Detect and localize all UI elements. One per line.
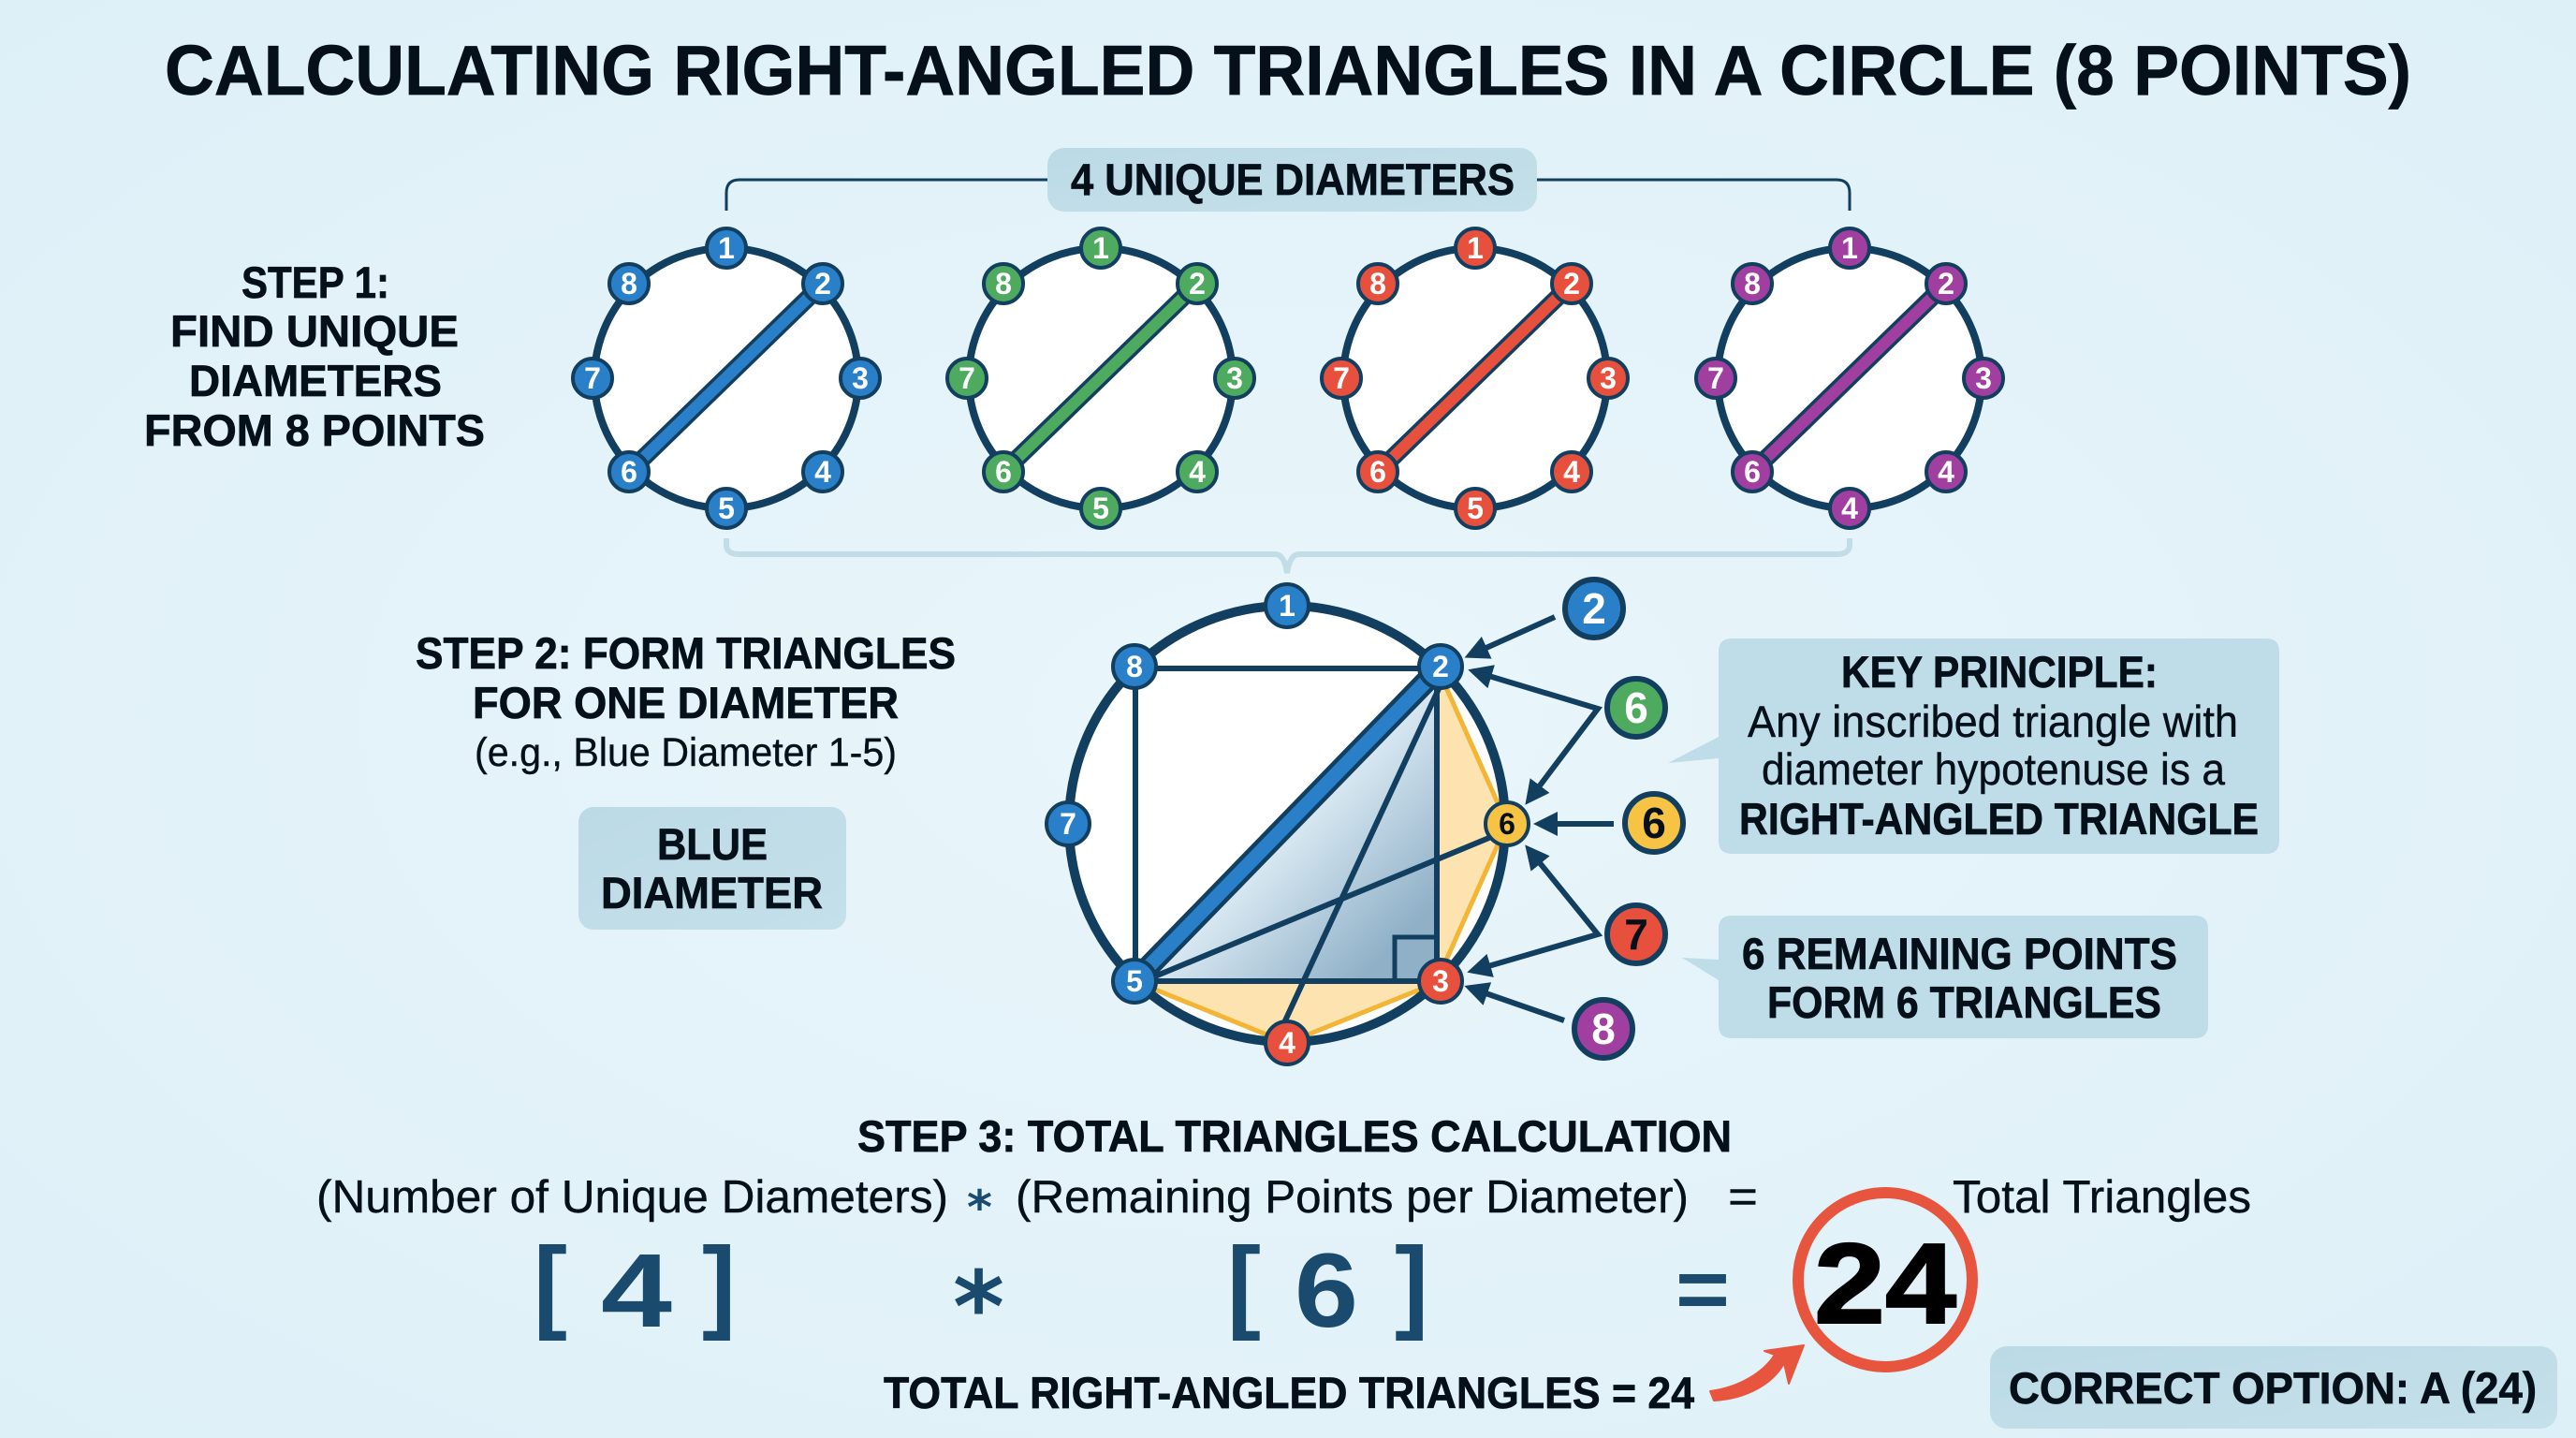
step 2 heading: STEP 2: FORM TRIANGLES — [416, 628, 956, 678]
diameter circle 2: green: 1 — [1092, 231, 1109, 265]
diameter circle 2: green: 6 — [995, 455, 1012, 489]
diameter circle 3: red: 3 — [1600, 361, 1617, 395]
diameter circle 3: red: 7 — [1333, 361, 1350, 395]
yellow triangles — [1134, 667, 1507, 1043]
lower bracket joining circles to step 2 — [726, 538, 1850, 573]
formula in words: * — [967, 1181, 992, 1235]
blue diameter label: BLUE — [657, 819, 768, 869]
diameter circle 1: blue: 6 — [621, 455, 637, 489]
diameter circle 2: green: 3 — [1226, 361, 1243, 395]
shaded right triangle — [1134, 667, 1441, 981]
diameter circle 1: blue: 3 — [852, 361, 869, 395]
correct option badge — [1990, 1346, 2557, 1429]
formula in numbers: 4 — [601, 1232, 672, 1349]
formula in words: (Number of Unique Diameters) — [316, 1172, 948, 1223]
step 1 heading: STEP 1: — [242, 257, 389, 307]
diameter circle 3: red: 4 — [1563, 455, 1580, 489]
diameter circle 3: red — [1322, 228, 1628, 528]
diameter circle 2: green: 5 — [1092, 492, 1109, 525]
total text: TOTAL RIGHT-ANGLED TRIANGLES = 24 — [884, 1368, 1694, 1417]
formula in numbers: 6 — [1295, 1232, 1358, 1349]
numbered points: 5 — [1126, 964, 1143, 998]
title: CALCULATING RIGHT-ANGLED TRIANGLES IN A CIRCLE (8 POINTS) — [165, 31, 2411, 110]
step 2 heading — [416, 628, 956, 775]
formula in numbers: ] — [702, 1226, 736, 1342]
key principle callout: RIGHT-ANGLED TRIANGLE — [1739, 794, 2259, 844]
main circle with inscribed triangles — [1046, 584, 1529, 1064]
key principle callout — [1668, 638, 2279, 854]
step 1 heading: FIND UNIQUE — [170, 306, 459, 356]
top bracket: 4 unique diameters — [726, 148, 1850, 212]
numbered points: 2 — [1432, 650, 1449, 683]
step 2 heading: FOR ONE DIAMETER — [473, 678, 899, 727]
numbered points — [1046, 584, 1529, 1064]
callout points: 8 — [1591, 1005, 1616, 1053]
step 3 heading: STEP 3: TOTAL TRIANGLES CALCULATION — [857, 1111, 1732, 1161]
diameter circle 3: red: 5 — [1467, 492, 1484, 525]
formula in words: Total Triangles — [1953, 1172, 2251, 1223]
correct option badge: CORRECT OPTION: A (24) — [2009, 1363, 2537, 1413]
diameter circle 1: blue: 8 — [621, 267, 637, 301]
step 1 heading: DIAMETERS — [189, 356, 442, 405]
numbered points: 3 — [1432, 964, 1449, 998]
blue diameter label: DIAMETER — [601, 868, 823, 917]
step 1 heading: FROM 8 POINTS — [144, 405, 485, 455]
hypotenuse diameter — [1134, 667, 1441, 981]
diameter circle 4: purple: 4 — [1938, 455, 1954, 489]
callout points — [1565, 580, 1683, 1058]
arrows from callout points — [1470, 617, 1614, 1020]
formula in words: (Remaining Points per Diameter) — [1016, 1172, 1689, 1223]
diameter circle 3: red: 1 — [1467, 231, 1484, 265]
numbered points: 4 — [1279, 1026, 1295, 1060]
top bracket: 4 unique diameters: 4 UNIQUE DIAMETERS — [1071, 154, 1515, 204]
diameter circle 3: red: 6 — [1369, 455, 1386, 489]
step 2 heading: (e.g., Blue Diameter 1-5) — [475, 730, 897, 775]
numbered points: 1 — [1279, 589, 1295, 623]
callout points: 2 — [1582, 584, 1606, 633]
diameter circle 4: purple: 7 — [1707, 361, 1724, 395]
formula in numbers: = — [1676, 1243, 1730, 1337]
answer circle 24 — [1798, 1193, 1972, 1367]
key principle callout: diameter hypotenuse is a — [1762, 744, 2226, 794]
diameter circle 1: blue: 2 — [814, 267, 831, 301]
diameter circle 3: red: 8 — [1369, 267, 1386, 301]
diameter circle 3: red: 2 — [1563, 267, 1580, 301]
callout points: 7 — [1624, 910, 1648, 959]
callout points: 6 — [1624, 683, 1648, 732]
diameter circle 1: blue: 5 — [718, 492, 735, 525]
formula in words: = — [1728, 1172, 1758, 1223]
diameter circle 2: green: 7 — [959, 361, 975, 395]
diameter circle 1: blue: 1 — [718, 231, 735, 265]
remaining points callout: FORM 6 TRIANGLES — [1767, 977, 2161, 1027]
chords — [1134, 667, 1507, 1043]
diameter circle 2: green — [947, 228, 1254, 528]
formula in numbers — [534, 1226, 1730, 1365]
diameter circle 4: purple: 2 — [1938, 267, 1954, 301]
diameter circle 1: blue: 7 — [584, 361, 601, 395]
remaining points callout — [1682, 916, 2208, 1038]
formula in numbers: * — [953, 1251, 1004, 1365]
diameter circle 4: purple: 6 — [1744, 455, 1761, 489]
diameter circle 4: purple: 4 — [1841, 492, 1858, 525]
remaining points callout: 6 REMAINING POINTS — [1742, 929, 2177, 978]
diameter circle 4: purple: 8 — [1744, 267, 1761, 301]
formula in numbers: [ — [534, 1226, 567, 1342]
diameter circle 2: green: 8 — [995, 267, 1012, 301]
formula in numbers: ] — [1395, 1226, 1428, 1342]
diameter circle 4: purple: 3 — [1975, 361, 1992, 395]
formula in numbers: [ — [1227, 1226, 1261, 1342]
key principle callout: Any inscribed triangle with — [1748, 697, 2238, 746]
diameter circle 2: green: 4 — [1189, 455, 1206, 489]
numbered points: 6 — [1499, 807, 1515, 841]
diameter circle 2: green: 2 — [1189, 267, 1206, 301]
key principle callout: KEY PRINCIPLE: — [1841, 647, 2158, 697]
formula in words — [316, 1172, 2251, 1235]
step 1 heading — [144, 257, 485, 455]
answer circle 24: 24 — [1814, 1220, 1956, 1347]
diameter circle 1: blue — [573, 228, 880, 528]
red arrow — [1710, 1345, 1804, 1401]
numbered points: 8 — [1126, 650, 1143, 683]
diameter circle 1: blue: 4 — [814, 455, 831, 489]
callout points: 6 — [1642, 799, 1666, 847]
diameter circle 4: purple — [1696, 228, 2003, 528]
numbered points: 7 — [1060, 807, 1076, 841]
diameter circle 4: purple: 1 — [1841, 231, 1858, 265]
blue diameter label — [578, 807, 846, 930]
